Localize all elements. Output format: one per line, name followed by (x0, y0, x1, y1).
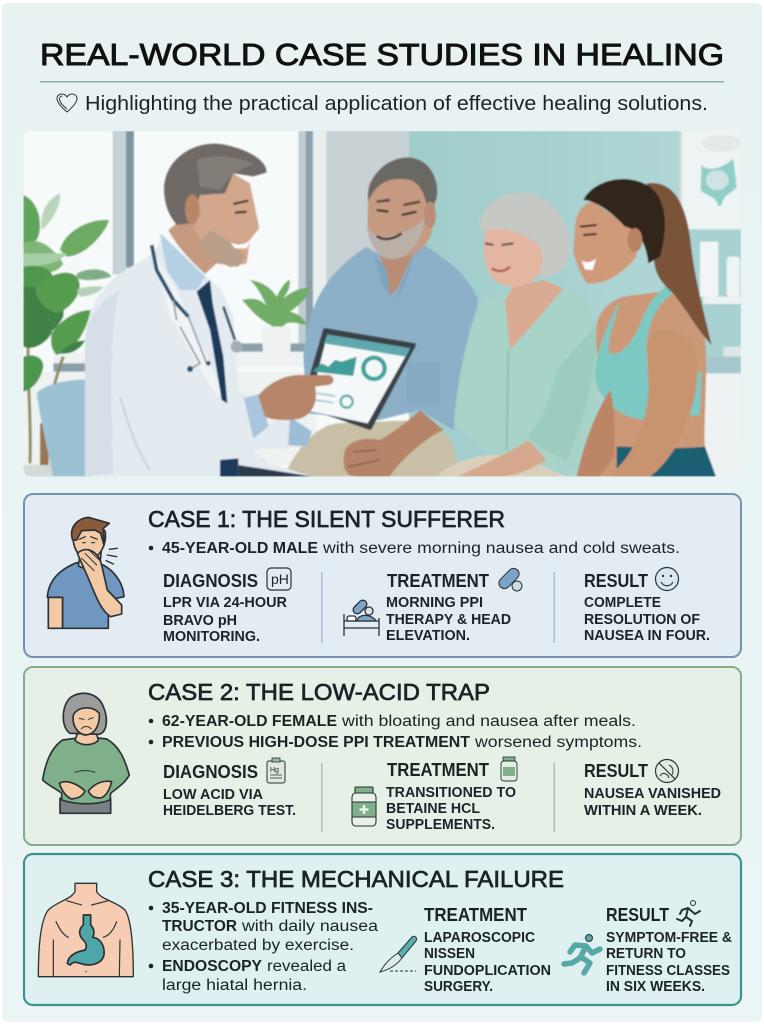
left plant (23, 193, 112, 465)
result column: SYMPTOM-FREE & (606, 930, 733, 946)
tablet with health charts (303, 330, 414, 428)
result column: WITHIN A WEEK. (584, 803, 702, 819)
heading: CASE 3: THE MECHANICAL FAILURE (148, 866, 564, 892)
title: REAL-WORLD CASE STUDIES IN HEALING (40, 37, 724, 72)
treatment column: TREATMENT (387, 760, 489, 780)
doctor (85, 143, 313, 477)
result column: IN SIX WEEKS. (606, 979, 705, 995)
diagnosis column: pH (271, 571, 289, 587)
older woman patient (437, 192, 598, 477)
result column: RESULT (584, 571, 648, 591)
patient summary bullets: ENDOSCOPY (162, 958, 263, 975)
diagnosis column: LPR VIA 24-HOUR (163, 595, 288, 611)
patient summary bullet (149, 540, 680, 557)
diagnosis column (163, 758, 296, 819)
result column: COMPLETE (584, 595, 661, 611)
patient summary bullets: 35-YEAR-OLD FITNESS INS- (162, 900, 373, 917)
subtitle with heart icon: Highlighting the practical application of effective healing solutions. (85, 93, 708, 115)
result column: RESULT (606, 905, 669, 925)
photo: doctor showing tablet to three patients (23, 131, 742, 477)
patient summary bullets: revealed a (267, 958, 346, 975)
man patient (283, 157, 478, 477)
result column (564, 900, 733, 995)
result column: NAUSEA IN FOUR. (584, 628, 710, 644)
patient summary bullets: exacerbated by exercise. (162, 937, 354, 954)
patient summary bullets: TRUCTOR (162, 918, 237, 935)
patient summary bullets: 62-YEAR-OLD FEMALE (162, 713, 337, 730)
heading: CASE 2: THE LOW-ACID TRAP (148, 679, 490, 705)
treatment column: LAPAROSCOPIC (424, 930, 535, 946)
doctor's pointing hand (258, 375, 334, 420)
icon: large supplement bottle (352, 787, 376, 826)
result column: FITNESS CLASSES (606, 963, 730, 979)
treatment column: TREATMENT (387, 571, 489, 591)
patient summary bullets: with daily nausea (241, 918, 378, 935)
room background (23, 131, 742, 477)
diagnosis column (163, 568, 291, 645)
treatment column: NISSEN (424, 946, 475, 962)
treatment column: FUNDOPLICATION (424, 963, 551, 979)
panel: case 3 (24, 854, 741, 1005)
panel: case 2 (24, 667, 741, 845)
treatment column: SURGERY. (424, 979, 493, 995)
result column: NAUSEA VANISHED (584, 786, 721, 802)
patient summary bullets: worsened symptoms. (474, 734, 642, 751)
icon: small runner (677, 900, 700, 926)
result column (584, 568, 710, 644)
panel: case 1 (24, 494, 741, 657)
patient summary bullets: large hiatal hernia. (162, 977, 307, 994)
chair (37, 379, 88, 477)
result column (584, 760, 721, 819)
treatment column: ELEVATION. (386, 628, 470, 644)
icon: large runner (564, 934, 600, 973)
icon: nauseous man (47, 517, 124, 628)
heading: CASE 1: THE SILENT SUFFERER (148, 506, 505, 532)
treatment column (344, 566, 522, 644)
result column: RETURN TO (606, 946, 686, 962)
treatment column: SUPPLEMENTS. (386, 817, 495, 833)
diagnosis column: MONITORING. (163, 629, 260, 645)
patient summary bullets (149, 713, 642, 751)
icon: small supplement bottle (501, 757, 517, 781)
diagnosis column: BRAVO pH (163, 613, 237, 629)
treatment column: THERAPY & HEAD (386, 612, 511, 628)
icon: scalpel (380, 936, 417, 972)
treatment column: TREATMENT (424, 905, 527, 925)
athletic woman patient (573, 179, 716, 477)
diagnosis column: HEIDELBERG TEST. (163, 803, 296, 819)
patient summary bullets: PREVIOUS HIGH-DOSE PPI TREATMENT (162, 734, 471, 751)
icon: clipboard: Hg (270, 767, 279, 774)
icon: pill (497, 566, 522, 591)
diagnosis column: DIAGNOSIS (163, 762, 258, 782)
patient summary bullets (149, 900, 378, 994)
treatment column (352, 757, 517, 833)
icon: no nausea symbol (656, 760, 678, 782)
small window plant (242, 280, 310, 358)
result column: RESOLUTION OF (584, 612, 700, 628)
icon: older woman holding stomach (43, 693, 129, 813)
icon: bed with pill (344, 599, 379, 636)
diagnosis column: LOW ACID VIA (163, 787, 264, 803)
treatment column: MORNING PPI (386, 595, 483, 611)
treatment column (380, 905, 551, 995)
treatment column: TRANSITIONED TO (386, 785, 516, 801)
patient summary bullet: 45-YEAR-OLD MALE (162, 540, 318, 557)
patient summary bullet: with severe morning nausea and cold sweats. (322, 540, 680, 557)
icon: torso with stomach (38, 883, 133, 977)
icon: smiley (656, 568, 678, 590)
diagnosis column: DIAGNOSIS (163, 571, 258, 591)
result column: RESULT (584, 761, 648, 781)
patient summary bullets: with bloating and nausea after meals. (341, 713, 636, 730)
treatment column: BETAINE HCL (386, 801, 480, 817)
